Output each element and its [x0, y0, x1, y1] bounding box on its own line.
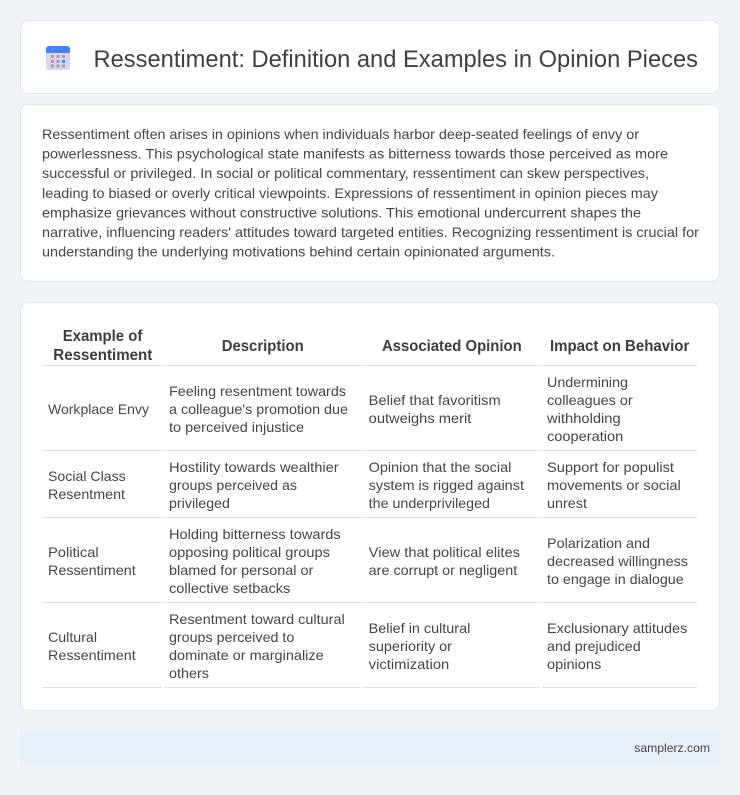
- text block: introduction paragraph: understanding the underlying motivations behind certain opinionated arguments.: [42, 244, 555, 260]
- table row: political ressentiment: decreased willingness: [547, 553, 688, 569]
- table row: social class resentment: Support for populist: [547, 459, 674, 475]
- table row: workplace envy: a colleague's promotion due: [169, 401, 348, 417]
- table row: political ressentiment: [48, 526, 688, 596]
- table row: cultural ressentiment: groups perceived to: [169, 629, 295, 645]
- table row: workplace envy: to perceived injustice: [169, 419, 304, 435]
- panel: introduction: [20, 104, 720, 282]
- table row: political ressentiment: Ressentiment: [48, 562, 136, 578]
- table row: workplace envy: withholding: [546, 410, 621, 426]
- table row: political ressentiment: opposing political groups: [169, 544, 330, 560]
- table row: workplace envy: [48, 374, 633, 444]
- table row: social class resentment: [48, 459, 681, 511]
- table row: cultural ressentiment: Ressentiment: [48, 647, 136, 663]
- table row: cultural ressentiment: victimization: [369, 656, 449, 672]
- table row: cultural ressentiment: Cultural: [48, 629, 97, 645]
- table row: social class resentment: Hostility towards wealthier: [169, 459, 339, 475]
- text block: introduction paragraph: emphasize grievances without constructive solutions. This emotional undercurrent shapes the: [42, 204, 641, 220]
- table row: political ressentiment: Polarization and: [547, 535, 650, 551]
- table row: social class resentment: unrest: [547, 495, 587, 511]
- text block: introduction paragraph: powerlessness. This psychological state manifests as bitterness towards those perceived as more: [42, 146, 668, 162]
- text block: introduction paragraph: leading to biased or overly critical viewpoints. Expressions of ressentiment in opinion pieces may: [42, 185, 658, 201]
- text block: introduction paragraph: narrative, influencing readers' attitudes toward targeted entities. Recognizing ressentiment is crucial for: [42, 224, 699, 240]
- table row: social class resentment: Social Class: [48, 468, 126, 484]
- table row: social class resentment: movements or social: [547, 477, 681, 493]
- table header row: [53, 328, 689, 364]
- footer source text: samplerz.com: [634, 741, 710, 755]
- table header row: Ressentiment: [53, 347, 153, 364]
- text block: introduction paragraph: [42, 126, 699, 260]
- table row: cultural ressentiment: Exclusionary attitudes: [547, 620, 687, 636]
- footer bar: [20, 731, 720, 765]
- table row: workplace envy: Undermining: [547, 374, 628, 390]
- table row: workplace envy: Belief that favoritism: [369, 392, 501, 408]
- table row: political ressentiment: blamed for personal or: [169, 562, 314, 578]
- table row: cultural ressentiment: superiority or: [369, 638, 452, 654]
- table row: social class resentment: groups perceived as: [169, 477, 297, 493]
- table row: workplace envy: colleagues or: [547, 392, 633, 408]
- table row: political ressentiment: collective setbacks: [169, 580, 290, 596]
- table header row: Description: [222, 338, 304, 355]
- table row: cultural ressentiment: [48, 611, 687, 681]
- table row: workplace envy: cooperation: [547, 428, 623, 444]
- panel: title header: [20, 20, 720, 94]
- title: Ressentiment: Definition and Examples in Opinion Pieces: [94, 46, 698, 73]
- table header row: Example of: [63, 328, 143, 345]
- table row: social class resentment: the underprivileged: [369, 495, 490, 511]
- table row: cultural ressentiment: Resentment toward cultural: [169, 611, 345, 627]
- table row: social class resentment: Resentment: [48, 486, 125, 502]
- table row: social class resentment: Opinion that the social: [369, 459, 511, 475]
- table row: cultural ressentiment: and prejudiced: [547, 638, 641, 654]
- icon: calendar: [46, 46, 70, 70]
- table row: workplace envy: outweighs merit: [369, 410, 471, 426]
- table row: social class resentment: privileged: [169, 495, 230, 511]
- table row: political ressentiment: are corrupt or negligent: [369, 562, 517, 578]
- table row: workplace envy: Feeling resentment towards: [169, 383, 346, 399]
- table row: cultural ressentiment: opinions: [547, 656, 601, 672]
- table row: political ressentiment: to engage in dialogue: [547, 571, 684, 587]
- table row: cultural ressentiment: Belief in cultural: [369, 620, 470, 636]
- table row: political ressentiment: View that political elites: [369, 544, 520, 560]
- text block: introduction paragraph: Ressentiment often arises in opinions when individuals harbor deep-seated feelings of envy or: [42, 126, 639, 142]
- table row: political ressentiment: Political: [48, 544, 99, 560]
- text block: introduction paragraph: successful or privileged. In social or political commentary, ressentiment can skew perspectives,: [42, 165, 649, 181]
- table row: social class resentment: system is rigged against: [369, 477, 524, 493]
- table header row: Impact on Behavior: [550, 338, 689, 355]
- table row: political ressentiment: Holding bitterness towards: [169, 526, 341, 542]
- panel: examples table: [20, 302, 720, 710]
- table header row: Associated Opinion: [382, 338, 522, 355]
- table row: workplace envy: Workplace Envy: [48, 401, 149, 417]
- table row: cultural ressentiment: others: [169, 665, 209, 681]
- table row: cultural ressentiment: dominate or marginalize: [169, 647, 324, 663]
